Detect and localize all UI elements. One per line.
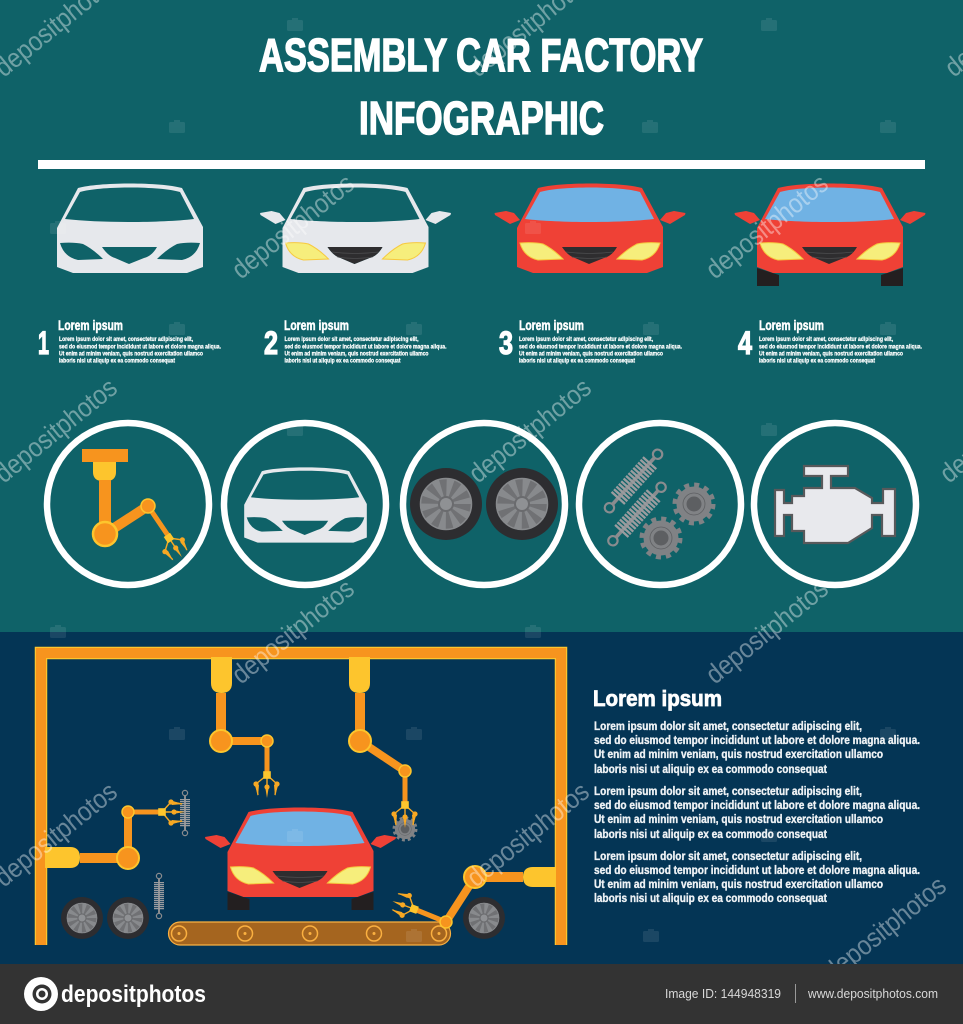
step 1 text — [38, 318, 221, 364]
car stage 2: body with mirrors and lights — [260, 184, 451, 273]
footer image id: Image ID: 144948319 — [665, 987, 781, 1001]
step 4 text: Lorem ipsum — [759, 318, 824, 333]
wheel left 2 — [107, 897, 149, 939]
footer logo: depositphotos — [61, 981, 206, 1008]
step 4 text: sed do eiusmod tempor incididunt ut labore et dolore magna aliqua. — [759, 344, 922, 350]
watermark overlay: depositphotos — [463, 372, 597, 489]
text block 3 — [594, 851, 920, 905]
step 2 text: Lorem ipsum — [284, 318, 349, 333]
text block 1: laboris nisi ut aliquip ex ea commodo consequat — [594, 764, 827, 776]
panel: teal upper background — [0, 0, 963, 632]
step 4 text: laboris nisi ut aliquip ex ea commodo consequat — [759, 358, 875, 364]
step 1 text: Lorem ipsum — [58, 318, 123, 333]
text block 2: sed do eiusmod tempor incididunt ut labore et dolore magna aliqua. — [594, 800, 920, 812]
watermark overlay: depositphotos — [226, 573, 360, 690]
step 2 text: Lorem ipsum dolor sit amet, consectetur adipiscing elit, — [284, 336, 419, 343]
text block 2: Ut enim ad minim veniam, quis nostrud exercitation ullamco — [594, 814, 883, 826]
icon circle: engine — [754, 423, 916, 585]
footer website: www.depositphotos.com — [807, 987, 938, 1001]
watermark overlay: depositphotos — [818, 870, 952, 987]
step 2 text: sed do eiusmod tempor incididunt ut labore et dolore magna aliqua. — [284, 344, 447, 350]
footer logo — [24, 977, 206, 1011]
step 3 text: laboris nisi ut aliquip ex ea commodo consequat — [519, 358, 635, 364]
title: INFOGRAPHIC — [359, 92, 604, 144]
step 2 text — [264, 318, 447, 364]
text block 1: Ut enim ad minim veniam, quis nostrud exercitation ullamco — [594, 749, 883, 761]
step 4 text: 4 — [738, 325, 752, 361]
wheel right — [463, 897, 505, 939]
watermark overlay: depositphotos — [700, 573, 834, 690]
conveyor belt — [168, 922, 450, 945]
factory frame — [41, 653, 561, 945]
panel: navy lower background — [0, 632, 963, 964]
text block 3: Lorem ipsum dolor sit amet, consectetur adipiscing elit, — [594, 851, 862, 863]
text block 2: Lorem ipsum dolor sit amet, consectetur adipiscing elit, — [594, 786, 862, 798]
step 1 text: laboris nisi ut aliquip ex ea commodo consequat — [59, 358, 175, 364]
step 2 text: 2 — [264, 325, 278, 361]
step 2 text: Ut enim ad minim veniam, quis nostrud exercitation ullamco — [284, 350, 429, 358]
text block 3: Ut enim ad minim veniam, quis nostrud exercitation ullamco — [594, 879, 883, 891]
text block 3: sed do eiusmod tempor incididunt ut labore et dolore magna aliqua. — [594, 865, 920, 877]
step 4 text — [738, 318, 922, 364]
step 1 text: Ut enim ad minim veniam, quis nostrud exercitation ullamco — [59, 350, 203, 358]
icon circle: wheels — [403, 423, 565, 585]
step 3 text: 3 — [499, 325, 513, 361]
robot arm: left with spring — [45, 790, 188, 869]
icon circle: robot arm — [47, 423, 209, 585]
car stage 4: red car with wheels — [734, 184, 926, 286]
title — [259, 29, 703, 144]
factory frame inner — [41, 653, 561, 945]
title: ASSEMBLY CAR FACTORY — [259, 29, 703, 81]
panel: four assembly car stages — [57, 184, 926, 286]
title underline — [38, 160, 925, 169]
step 2 text: laboris nisi ut aliquip ex ea commodo consequat — [284, 358, 400, 364]
step 3 text: Lorem ipsum dolor sit amet, consectetur adipiscing elit, — [519, 336, 653, 343]
robot arm: right above conveyor — [388, 866, 556, 928]
watermark overlay: depositphotos — [226, 168, 360, 285]
text block 3: laboris nisi ut aliquip ex ea commodo consequat — [594, 893, 827, 905]
watermark overlay: depositphotos — [461, 776, 595, 893]
step 3 text: Lorem ipsum — [519, 318, 584, 333]
step 3 text — [499, 318, 682, 364]
watermark overlay: depositphotos — [700, 168, 834, 285]
step 4 text: Ut enim ad minim veniam, quis nostrud exercitation ullamco — [759, 350, 903, 358]
text block 1: Lorem ipsum dolor sit amet, consectetur adipiscing elit, — [594, 721, 862, 733]
step 1 text: 1 — [38, 325, 49, 361]
car stage 3: painted red car — [494, 184, 686, 273]
wheel left 1 — [61, 897, 103, 939]
text block 2 — [594, 786, 920, 841]
step 1 text: Lorem ipsum dolor sit amet, consectetur adipiscing elit, — [59, 336, 193, 343]
robot arm: top left — [210, 657, 280, 798]
text block 1: sed do eiusmod tempor incididunt ut labore et dolore magna aliqua. — [594, 735, 920, 747]
step 4 text: Lorem ipsum dolor sit amet, consectetur adipiscing elit, — [759, 336, 893, 343]
panel: footer bar — [0, 964, 963, 1024]
car stage 1: bare body shell — [57, 184, 203, 273]
step 3 text: sed do eiusmod tempor incididunt ut labore et dolore magna aliqua. — [519, 344, 682, 350]
heading: side text: Lorem ipsum — [593, 686, 722, 711]
robot arm: top right with gear — [349, 657, 418, 840]
icon circle: car body — [224, 423, 386, 585]
footer divider — [795, 984, 796, 1003]
red car on the assembly line — [205, 808, 396, 910]
icon circle: springs and gears — [579, 423, 741, 585]
loose spring — [156, 873, 162, 919]
text block 1 — [594, 721, 920, 776]
text block 2: laboris nisi ut aliquip ex ea commodo consequat — [594, 829, 827, 841]
step 3 text: Ut enim ad minim veniam, quis nostrud exercitation ullamco — [519, 350, 663, 358]
step 1 text: sed do eiusmod tempor incididunt ut labore et dolore magna aliqua. — [59, 344, 221, 350]
